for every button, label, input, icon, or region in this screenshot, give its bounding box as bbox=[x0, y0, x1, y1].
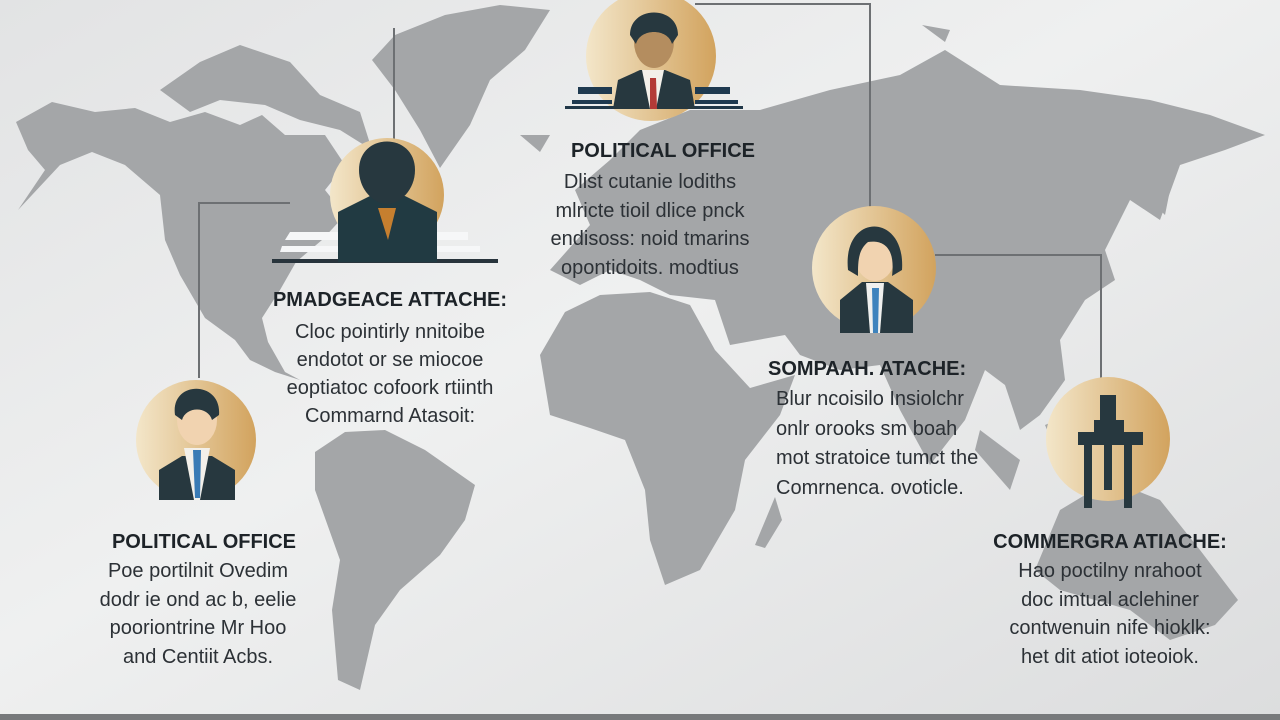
text: lower left political officer bbox=[100, 531, 296, 668]
text: lower left political officer: POLITICAL OFFICE bbox=[112, 531, 296, 553]
text: right attache: Comrnenca. ovoticle. bbox=[776, 476, 964, 498]
text: commercial attache: COMMERGRA ATIACHE: bbox=[993, 531, 1227, 553]
text: commercial attache bbox=[993, 531, 1227, 668]
connector lines bbox=[199, 4, 1101, 380]
text: left attache: Commarnd Atasoit: bbox=[305, 405, 475, 427]
text: top political officer: opontidoits. modtius bbox=[561, 256, 739, 278]
portrait: lower left political officer bbox=[136, 380, 256, 500]
text: lower left political officer: and Centiit Acbs. bbox=[123, 646, 273, 668]
text: right attache: mot stratoice tumct the bbox=[776, 447, 978, 469]
text: left attache: Cloc pointirly nnitoibe bbox=[295, 321, 485, 343]
portrait: top political officer bbox=[565, 0, 743, 121]
text: left attache bbox=[273, 289, 507, 427]
text: commercial attache: het dit atiot ioteoiok. bbox=[1021, 646, 1199, 668]
text: left attache: endotot or se miocoe bbox=[297, 349, 483, 371]
text: right attache: Blur ncoisilo Insiolchr bbox=[776, 388, 964, 410]
text: top political officer: POLITICAL OFFICE bbox=[571, 140, 755, 162]
portrait: left attache bbox=[272, 138, 498, 263]
text: lower left political officer: pooriontrine Mr Hoo bbox=[110, 617, 286, 639]
text: left attache: eoptiatoc cofoork rtiinth bbox=[287, 377, 493, 399]
text: top political officer: Dlist cutanie lodiths bbox=[564, 171, 736, 193]
text: right attache: SOMPAAH. ATACHE: bbox=[768, 358, 966, 380]
text: lower left political officer: Poe portilnit Ovedim bbox=[108, 560, 288, 582]
text: right attache: onlr orooks sm boah bbox=[776, 418, 957, 440]
text: commercial attache: Hao poctilny nrahoot bbox=[1018, 560, 1202, 582]
icon: building monument bbox=[1046, 377, 1170, 508]
portrait: right attache bbox=[812, 206, 936, 333]
text: lower left political officer: dodr ie ond ac b, eelie bbox=[100, 588, 296, 610]
text: top political officer: endisoss: noid tmarins bbox=[550, 228, 749, 250]
text: commercial attache: doc imtual aclehiner bbox=[1021, 588, 1199, 610]
text: top political officer: mlricte tioil dlice pnck bbox=[556, 200, 744, 222]
text: right attache bbox=[768, 358, 978, 498]
text: commercial attache: contwenuin nife hioklk: bbox=[1009, 617, 1211, 639]
text: left attache: PMADGEACE ATTACHE: bbox=[273, 289, 507, 311]
text: top political officer bbox=[550, 140, 755, 278]
